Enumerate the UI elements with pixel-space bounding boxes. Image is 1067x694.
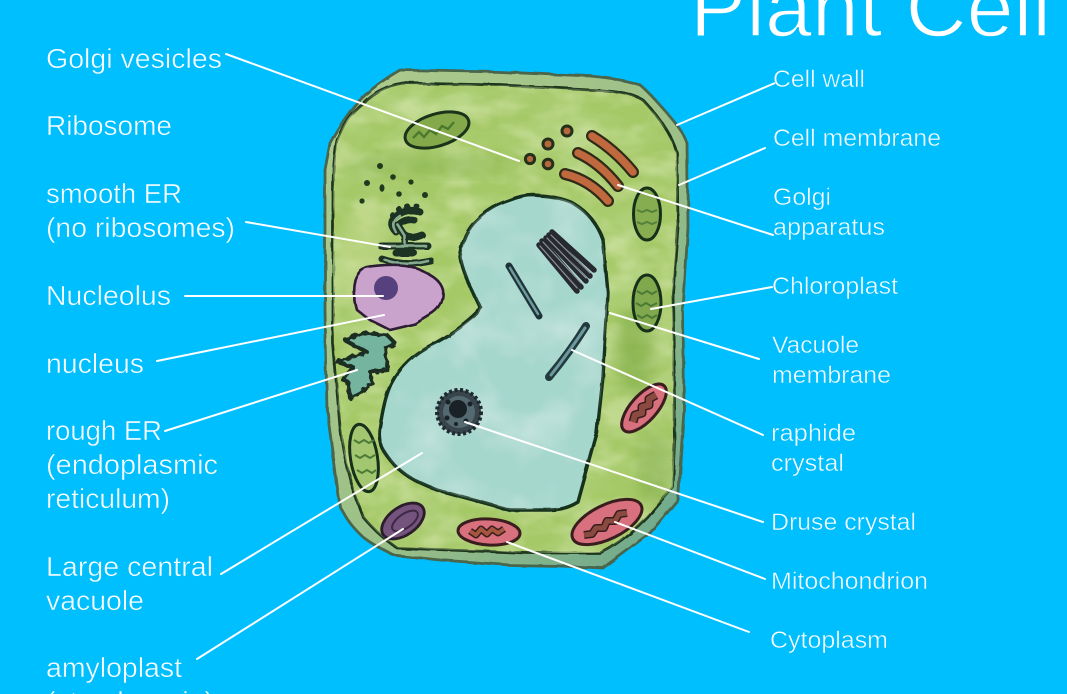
label: Golgi apparatus: Golgi	[773, 184, 831, 211]
label: smooth ER: smooth ER	[46, 178, 182, 209]
label: rough ER	[46, 415, 218, 514]
golgi vesicles	[525, 126, 572, 169]
left leader lines	[157, 54, 519, 659]
label: Large central vacuole	[46, 551, 213, 616]
top left chloroplast	[401, 105, 473, 155]
label: rough ER: rough ER	[46, 415, 162, 446]
label: smooth ER	[46, 178, 235, 243]
golgi apparatus	[565, 136, 633, 201]
left labels	[46, 43, 235, 694]
right upper chloroplast	[634, 188, 660, 240]
smooth ER	[381, 206, 431, 264]
right lower chloroplast	[633, 275, 661, 331]
amyloplast	[375, 496, 431, 546]
label: Cell wall: Cell wall	[773, 66, 865, 93]
label: amyloplast: amyloplast	[46, 652, 182, 683]
label: rough ER: (endoplasmic	[46, 449, 218, 480]
nucleus	[354, 265, 443, 330]
ribosomes	[359, 163, 428, 204]
raphide crystal lower	[549, 326, 586, 377]
right labels	[770, 66, 941, 654]
cytoplasm shading	[325, 75, 685, 565]
label: Large central vacuole: vacuole	[46, 585, 144, 616]
label: Vacuole membrane: membrane	[772, 362, 891, 389]
label: Nucleolus: Nucleolus	[46, 280, 171, 311]
bottom left chloroplast	[345, 422, 383, 494]
label: Vacuole membrane	[772, 332, 891, 389]
nucleolus	[374, 276, 398, 300]
label: Chloroplast: Chloroplast	[772, 273, 898, 300]
label: amyloplast	[46, 652, 214, 694]
label: Ribosome: Ribosome	[46, 110, 172, 141]
label: Golgi vesicles: Golgi vesicles	[46, 43, 222, 74]
label: smooth ER: (no ribosomes)	[46, 212, 235, 243]
cell wall	[325, 70, 688, 568]
label: Cytoplasm: Cytoplasm	[770, 627, 888, 654]
mitochondrion upper right	[614, 377, 674, 439]
raphide crystal upper	[509, 266, 539, 316]
mitochondrion bottom	[457, 517, 521, 547]
label: Mitochondrion: Mitochondrion	[771, 568, 928, 595]
label: raphide crystal	[771, 420, 856, 477]
cell membrane and cytoplasm	[333, 83, 678, 553]
mitochondrion lower right	[565, 490, 649, 554]
large central vacuole	[379, 195, 608, 510]
druse crystal	[437, 390, 481, 434]
label: Druse crystal: Druse crystal	[771, 509, 916, 536]
raphide bundle	[539, 232, 594, 291]
label: Golgi apparatus: apparatus	[773, 214, 885, 241]
right leader lines	[465, 83, 775, 632]
vacuole shading	[378, 195, 610, 513]
label: Large central vacuole: Large central	[46, 551, 213, 582]
label: raphide crystal: raphide	[771, 420, 856, 447]
plant cell diagram	[325, 70, 688, 568]
label: nucleus: nucleus	[46, 348, 144, 379]
rough ER	[337, 333, 395, 398]
label: Cell membrane: Cell membrane	[773, 125, 941, 152]
label: raphide crystal: crystal	[771, 450, 844, 477]
label: Vacuole membrane: Vacuole	[772, 332, 859, 359]
label: Golgi apparatus	[773, 184, 885, 241]
label: rough ER: reticulum)	[46, 483, 170, 514]
